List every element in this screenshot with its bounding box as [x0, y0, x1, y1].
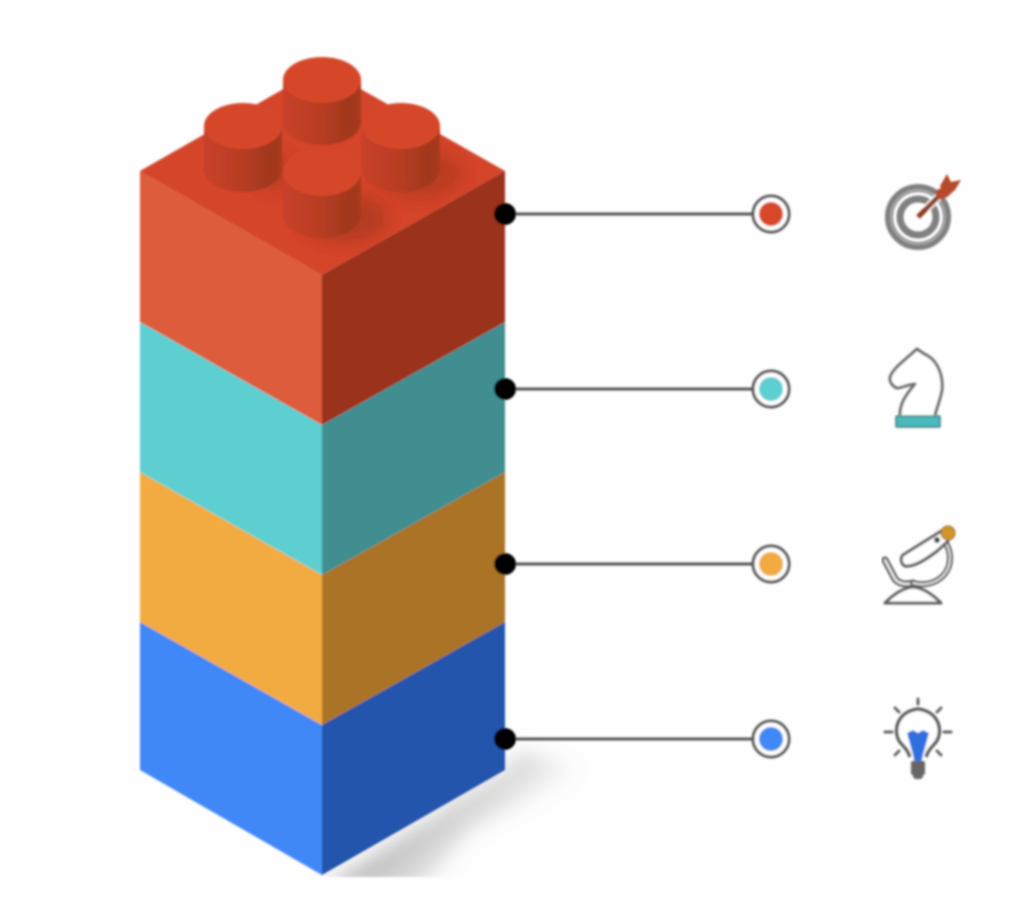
stud: back	[283, 57, 361, 145]
stud shadows	[257, 150, 462, 242]
stud: left	[204, 103, 282, 192]
red brick	[140, 57, 505, 425]
connector 1	[494, 196, 789, 232]
blue brick	[140, 622, 505, 875]
connector 4	[494, 721, 789, 757]
icon: target with dart	[889, 174, 961, 246]
connector 3	[494, 546, 789, 582]
orange brick	[140, 472, 505, 725]
connector 2	[494, 371, 789, 407]
icon: microscope	[885, 526, 955, 603]
stud: front	[283, 148, 361, 238]
brick tower	[140, 57, 789, 890]
teal brick	[140, 322, 505, 575]
icon: light bulb	[885, 699, 951, 779]
icon: chess knight	[890, 349, 942, 427]
ground shadow	[326, 744, 560, 878]
infographic	[138, 55, 962, 878]
icons	[885, 174, 961, 779]
stud: right	[362, 103, 440, 192]
